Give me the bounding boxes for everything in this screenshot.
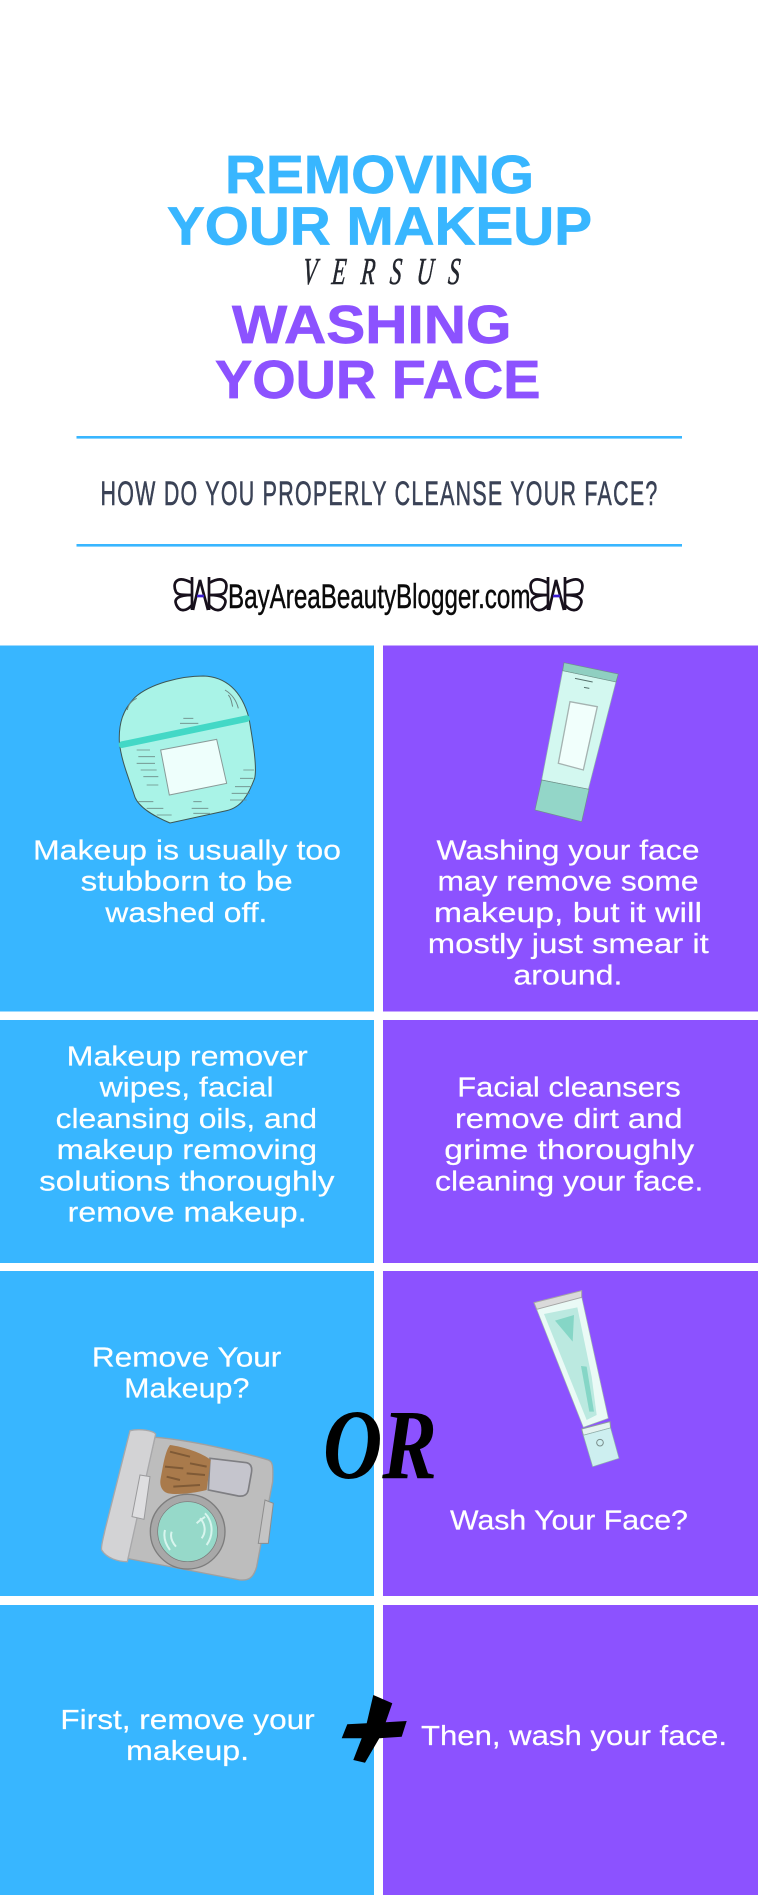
panel: row 3 right, wash your face — [383, 1271, 758, 1596]
text: facial cleansers: remove dirt and — [455, 1103, 683, 1134]
OR script overlay: OR — [323, 1389, 437, 1500]
website line with logos — [175, 577, 582, 616]
text: wash your face question: Wash Your Face? — [450, 1504, 688, 1535]
panel: row 2 right, facial cleansers — [383, 1020, 758, 1263]
icon: tube with pump cap — [534, 1291, 619, 1467]
text: first remove makeup: makeup. — [126, 1735, 249, 1766]
text: washing smears makeup: mostly just smear it — [428, 928, 709, 959]
text: makeup removers: cleansing oils, and — [56, 1103, 317, 1134]
title: removing your makeup — [167, 145, 592, 256]
text: makeup stubborn: Makeup is usually too — [33, 834, 341, 866]
text: makeup removers — [39, 1040, 334, 1228]
panel: row 3 left, remove your makeup — [0, 1271, 374, 1596]
text: first remove makeup: First, remove your — [60, 1704, 315, 1735]
text: washing smears makeup: may remove some — [438, 866, 698, 897]
panel: row 2 left, makeup removers — [0, 1020, 374, 1263]
title: versus: VERSUS — [301, 250, 462, 292]
text: makeup stubborn — [33, 834, 341, 928]
text: makeup removers: makeup removing — [57, 1134, 317, 1165]
title: washing your face — [215, 295, 540, 410]
text: remove your makeup question — [92, 1342, 281, 1404]
text: washing smears makeup: around. — [513, 959, 622, 990]
text: washing smears makeup: Washing your face — [436, 834, 700, 866]
title: removing your makeup: REMOVING — [225, 145, 534, 205]
website name: BayAreaBeautyBlogger.com — [228, 578, 530, 616]
panel: row 1 right, washing smears makeup — [383, 646, 758, 1012]
text: makeup stubborn: washed off. — [104, 897, 267, 928]
panel: row 1 left, makeup is stubborn — [0, 646, 374, 1012]
text: makeup removers: remove makeup. — [68, 1196, 306, 1228]
panel: row 4 right, then wash face — [383, 1605, 758, 1895]
text: then wash face: Then, wash your face. — [421, 1720, 727, 1751]
text: remove your makeup question: Remove Your — [92, 1342, 281, 1372]
icon: cream jar — [119, 676, 255, 823]
icon: plus sign — [342, 1695, 407, 1763]
text: facial cleansers: cleaning your face. — [435, 1165, 703, 1196]
text: makeup stubborn: stubborn to be — [81, 866, 293, 897]
subheading: HOW DO YOU PROPERLY CLEANSE YOUR FACE? — [100, 475, 657, 513]
text: makeup removers: solutions thoroughly — [39, 1165, 334, 1196]
title: washing your face: WASHING — [232, 295, 512, 355]
text: washing smears makeup — [428, 834, 709, 990]
icon: left logo — [175, 577, 226, 610]
icon: right logo — [531, 577, 582, 610]
panel: row 4 left, first remove makeup — [0, 1605, 374, 1895]
text: facial cleansers: Facial cleansers — [457, 1072, 681, 1103]
title: washing your face: YOUR FACE — [215, 350, 540, 410]
icon: cleanser tube — [535, 663, 618, 822]
icon: makeup compact with brush — [101, 1430, 273, 1580]
text: facial cleansers: grime thoroughly — [444, 1134, 694, 1165]
text: makeup removers: wipes, facial — [98, 1072, 274, 1103]
title: removing your makeup: YOUR MAKEUP — [167, 196, 592, 256]
text: washing smears makeup: makeup, but it will — [434, 897, 702, 928]
text: facial cleansers — [435, 1072, 703, 1196]
text: makeup removers: Makeup remover — [67, 1040, 308, 1072]
text: remove your makeup question: Makeup? — [124, 1373, 249, 1404]
text: first remove makeup — [60, 1704, 315, 1766]
